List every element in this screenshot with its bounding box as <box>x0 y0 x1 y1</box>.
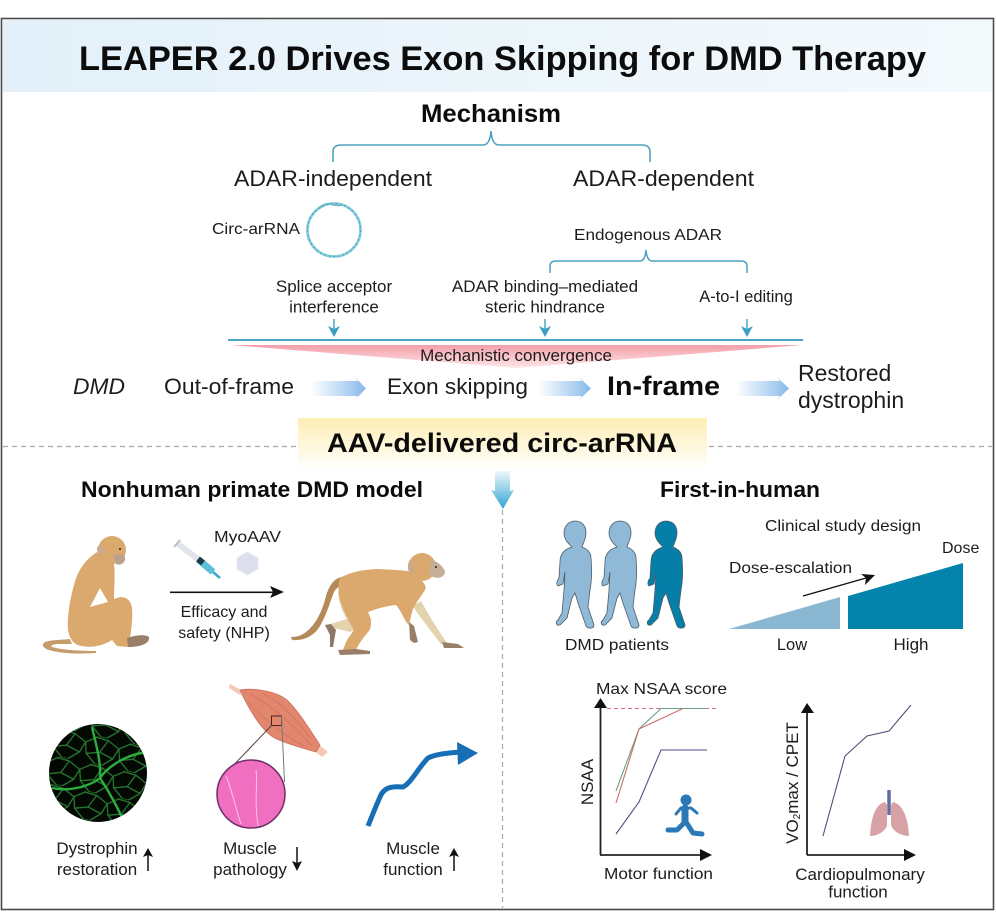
text: ADAR binding-mediated steric hindrance: steric hindrance <box>485 298 605 316</box>
icon: circular RNA <box>308 204 360 256</box>
icon: MyoAAV capsid <box>237 552 258 575</box>
label: dystrophin restoration: Dystrophin <box>56 839 138 858</box>
arrow: step 1 <box>311 377 366 400</box>
chart: NSAA motor function: Motor function <box>604 866 713 883</box>
text: splice acceptor interference: interference <box>289 298 379 316</box>
panel: mechanism <box>212 100 803 368</box>
label: DMD patients: DMD patients <box>565 637 669 654</box>
chart: NSAA motor function: Max NSAA score <box>596 681 727 698</box>
title band <box>3 20 992 92</box>
chart: VO2max cardiopulmonary function <box>783 703 925 902</box>
label: Endogenous ADAR: Endogenous ADAR <box>574 227 722 244</box>
icon: running child <box>668 794 702 834</box>
step: in-frame: In-frame <box>607 371 720 401</box>
chart: low dose wedge <box>729 597 840 629</box>
banner: AAV-delivered circ-arRNA <box>298 418 707 470</box>
label: muscle function <box>383 839 459 879</box>
arrow: dose-escalation <box>803 574 875 596</box>
text: splice acceptor interference: Splice acceptor <box>276 277 392 296</box>
label: dystrophin restoration <box>56 839 153 879</box>
label: dose: Dose <box>942 540 979 557</box>
chart: VO2max cardiopulmonary function: VO <box>783 819 802 844</box>
label: dose-escalation: Dose-escalation <box>729 560 852 577</box>
panel: nonhuman primate model <box>43 477 478 879</box>
label: muscle pathology <box>213 839 302 879</box>
chart: VO2max cardiopulmonary function: function <box>828 882 888 902</box>
icon: lungs <box>870 790 909 836</box>
arrow: treatment <box>170 586 284 598</box>
section dividers <box>3 446 992 908</box>
chart: VO2max cardiopulmonary function: max / CPET <box>783 722 802 814</box>
label: Circ-arRNA: Circ-arRNA <box>212 221 300 238</box>
label: MyoAAV: MyoAAV <box>214 529 281 546</box>
image: dystrophin fluorescence <box>49 724 148 822</box>
icon: muscle <box>229 684 328 757</box>
label: muscle function: function <box>383 860 443 879</box>
text: efficacy and safety: Efficacy and <box>181 604 267 621</box>
bracket: endogenous ADAR branches <box>550 250 747 273</box>
label: dystrophin restoration: restoration <box>57 860 137 879</box>
bracket: mechanism branches <box>333 131 650 162</box>
label: high: High <box>894 635 928 654</box>
chart: high dose wedge <box>848 563 963 629</box>
icon: DMD patients <box>556 521 685 628</box>
icon: seated monkey <box>43 536 149 654</box>
image: muscle histology <box>217 760 285 828</box>
heading: first-in-human: First-in-human <box>660 477 820 502</box>
arrow: banner to studies <box>491 471 514 509</box>
label: DMD gene: DMD <box>73 374 125 399</box>
banner: AAV-delivered circ-arRNA: AAV-delivered circ-arRNA <box>327 428 677 458</box>
chart: NSAA motor function <box>578 681 727 883</box>
heading: nonhuman primate: Nonhuman primate DMD model <box>81 477 423 502</box>
heading: mechanism: Mechanism <box>421 100 561 128</box>
label: clinical study design: Clinical study design <box>765 518 921 535</box>
icon: muscle function arrow <box>368 742 478 826</box>
text: ADAR binding-mediated steric hindrance: ADAR binding–mediated <box>452 277 638 296</box>
chart: VO2max cardiopulmonary function: 2 <box>792 813 803 819</box>
arrows: into convergence line <box>328 319 753 337</box>
chart: VO2max cardiopulmonary function: Cardiopulmonary <box>795 865 925 884</box>
arrow: step 3 <box>736 377 789 400</box>
label: muscle pathology: pathology <box>213 860 287 879</box>
convergence wedge <box>230 345 803 368</box>
convergence line <box>228 339 803 341</box>
text: A-to-I editing: A-to-I editing <box>699 288 793 306</box>
step: out-of-frame: Out-of-frame <box>164 374 294 399</box>
outcome: restored dystrophin: Restored <box>798 360 891 386</box>
arrow: step 2 <box>538 377 591 400</box>
icon: syringe <box>174 540 220 578</box>
title: LEAPER 2.0 Drives Exon Skipping for DMD Therapy <box>79 40 926 78</box>
outcome: restored dystrophin: dystrophin <box>798 387 904 413</box>
label: mechanistic convergence: Mechanistic convergence <box>420 346 612 365</box>
chart: NSAA motor function: NSAA <box>578 758 597 805</box>
label: muscle pathology: Muscle <box>223 839 277 858</box>
pathway row <box>73 360 904 413</box>
panel: first-in-human <box>556 477 979 902</box>
text: efficacy and safety: safety (NHP) <box>178 625 270 642</box>
label: ADAR-dependent: ADAR-dependent <box>573 166 754 191</box>
label: muscle function: Muscle <box>386 839 440 858</box>
icon: walking monkey <box>291 553 464 655</box>
label: low: Low <box>777 636 807 654</box>
label: ADAR-independent: ADAR-independent <box>234 166 432 191</box>
zoom lines and inset square <box>227 716 284 782</box>
step: exon skipping: Exon skipping <box>387 374 528 399</box>
